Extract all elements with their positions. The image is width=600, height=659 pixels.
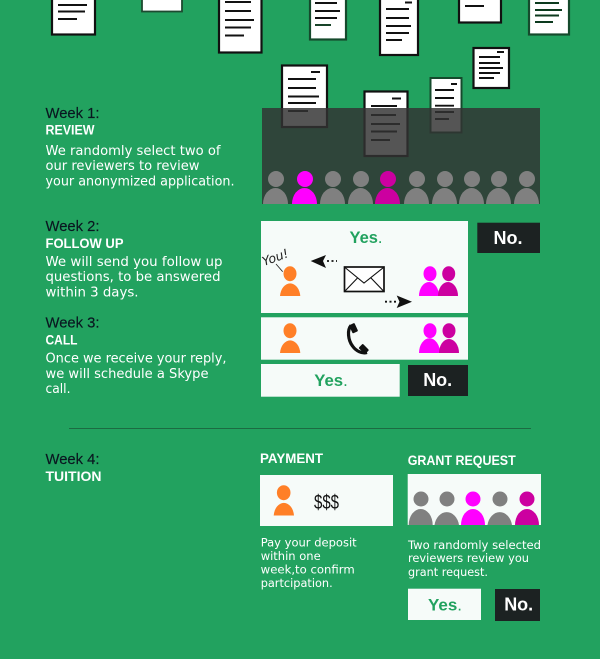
text block: week 2 follow up: We will send you follow up xyxy=(46,255,222,270)
text block: payment instructions xyxy=(261,536,357,590)
icon: applicant xyxy=(280,266,300,296)
document: falling application A xyxy=(52,0,95,34)
label: you: You! xyxy=(260,245,290,269)
text block: week 3 call: Once we receive your reply, xyxy=(46,352,226,367)
text block: week 4 tuition: Week 4: xyxy=(46,452,100,468)
heading: payment: PAYMENT xyxy=(260,451,324,466)
text block: week 3 call xyxy=(46,316,226,397)
text block: week 2 follow up xyxy=(46,219,222,300)
label: yes: Yes. xyxy=(350,228,382,247)
button: yes, grant xyxy=(408,589,481,620)
arrow: to reviewers xyxy=(385,296,412,308)
button: yes, grant: Yes. xyxy=(428,596,462,614)
button: no, week 3 xyxy=(408,365,468,396)
icon: envelope xyxy=(344,267,384,292)
button: yes, week 3 xyxy=(261,364,400,397)
text block: week 4 tuition: TUITION xyxy=(46,469,102,484)
text block: week 3 call: Week 3: xyxy=(46,316,100,332)
text block: week 1 review: We randomly select two of xyxy=(46,144,221,159)
button: no, grant xyxy=(495,589,540,621)
icon: two reviewers xyxy=(419,266,458,296)
icon: applicant xyxy=(274,485,294,516)
button: no, week 3: No. xyxy=(423,370,452,390)
text block: week 3 call: call. xyxy=(46,382,70,397)
icon: applicant xyxy=(280,323,300,353)
panel: follow up exchange xyxy=(260,221,468,313)
reviewer row xyxy=(263,171,539,204)
button: no, grant: No. xyxy=(504,594,533,614)
document: falling application G xyxy=(529,0,569,34)
panel: payment xyxy=(260,475,393,526)
text block: week 1 review: our reviewers to review xyxy=(46,159,200,174)
pointer line to applicant xyxy=(276,264,283,272)
text block: week 2 follow up: within 3 days. xyxy=(46,286,138,300)
text block: week 4 tuition xyxy=(46,452,102,484)
text block: week 1 review: REVIEW xyxy=(46,123,95,138)
text block: week 3 call: we will schedule a Skype xyxy=(46,367,208,382)
heading: grant request: GRANT REQUEST xyxy=(408,453,516,468)
text block: payment instructions: partcipation. xyxy=(261,576,333,590)
text block: week 1 review xyxy=(46,106,234,190)
button: no, week 2: No. xyxy=(494,228,522,248)
text block: week 3 call: CALL xyxy=(46,333,78,348)
text block: week 2 follow up: questions, to be answered xyxy=(46,270,220,285)
text block: week 1 review: your anonymized application. xyxy=(46,174,234,190)
text block: grant instructions: reviewers review you xyxy=(408,551,529,565)
document: application K entering panel xyxy=(430,78,462,132)
text block: payment instructions: Pay your deposit xyxy=(261,536,357,550)
text block: week 1 review: Week 1: xyxy=(46,106,100,122)
text block: grant instructions: Two randomly selected xyxy=(407,538,541,552)
text block: payment instructions: week,to confirm xyxy=(261,563,355,577)
text block: grant instructions xyxy=(407,538,541,579)
document: falling application D xyxy=(310,0,346,40)
arrow: to applicant xyxy=(311,255,337,268)
button: yes, week 3: Yes. xyxy=(314,371,348,390)
document: falling application H xyxy=(474,48,509,88)
document: application J entering panel xyxy=(364,92,408,156)
text block: week 2 follow up: FOLLOW UP xyxy=(46,236,124,251)
icon: two reviewers xyxy=(419,323,459,353)
panel: reviewer pool xyxy=(262,108,540,204)
document: falling application E xyxy=(380,0,418,55)
text block: grant instructions: grant request. xyxy=(408,565,488,579)
document: falling application C xyxy=(219,0,262,52)
document: application I entering panel xyxy=(282,66,327,127)
panel: grant reviewers xyxy=(408,474,541,525)
text block: week 2 follow up: Week 2: xyxy=(46,219,100,235)
button: no, week 2 xyxy=(477,223,540,253)
text block: payment instructions: within one xyxy=(261,549,321,563)
document: falling application F xyxy=(459,0,501,22)
document: falling application B xyxy=(142,0,182,12)
label: money: $$$ xyxy=(314,492,339,514)
panel: call xyxy=(261,317,468,360)
icon: telephone xyxy=(348,323,369,354)
